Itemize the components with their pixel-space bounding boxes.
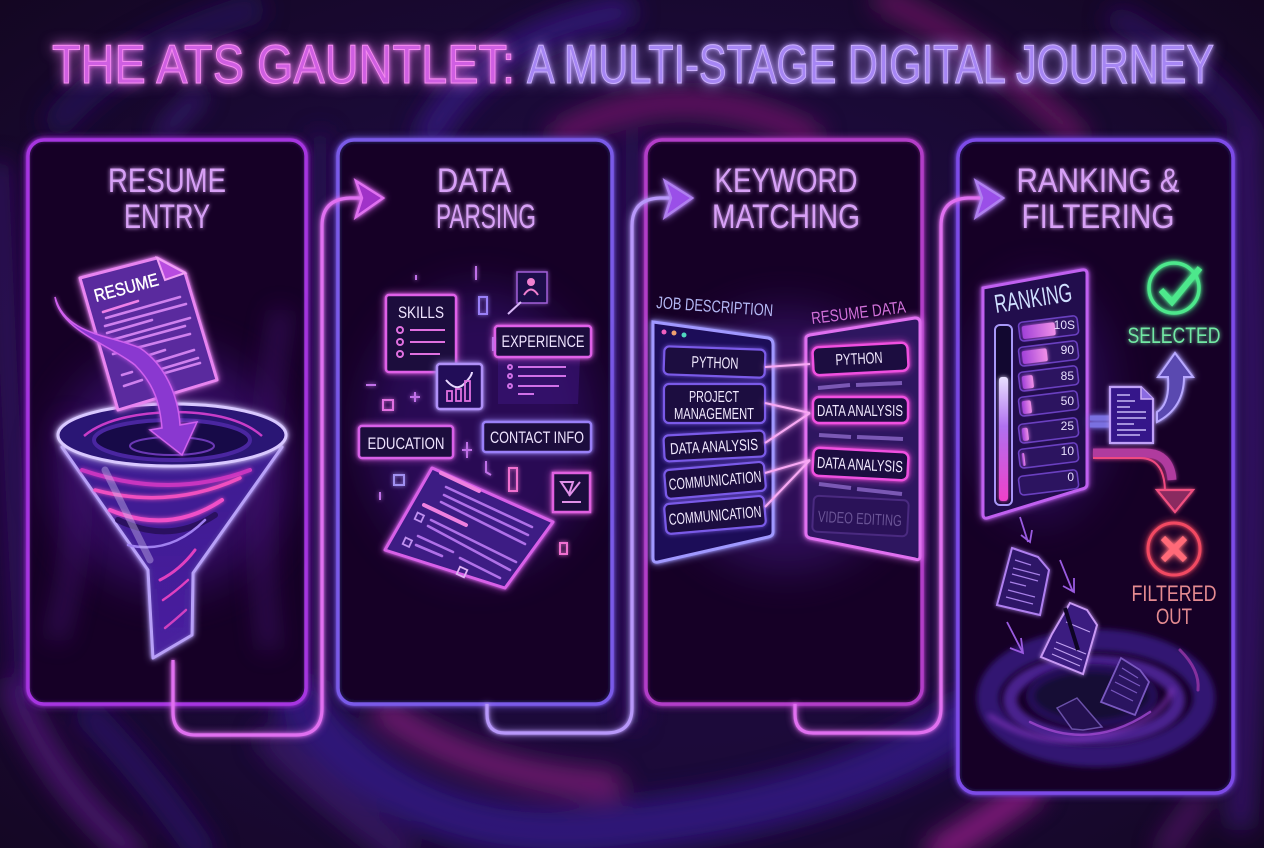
card: experience [495,326,591,404]
heading: resume entry: RESUME [108,162,226,200]
label: filtered out: OUT [1156,604,1192,629]
ranking rows: 0 [1067,470,1074,484]
heading: keyword matching: KEYWORD [714,162,858,200]
icon: funnel [58,404,286,658]
window: job description: COMMUNICATION [668,469,762,494]
card: contact info: CONTACT INFO [490,428,584,447]
ranking rows: 90 [1061,343,1074,357]
heading: data parsing: DATA [437,162,511,200]
matching lines [765,364,810,507]
title [52,33,1214,95]
window: job description: COMMUNICATION [668,504,762,529]
data particles [366,266,567,554]
heading: data parsing: PARSING [436,198,536,236]
card: skills [386,295,456,372]
vortex [988,640,1204,756]
ranking board: RANKING [992,277,1074,319]
icon: resume document [80,258,217,410]
card: education: EDUCATION [368,434,444,453]
heading: data parsing [436,162,536,236]
heading: ranking and filtering: FILTERING [1022,198,1174,236]
heading: resume entry [108,162,226,236]
window: resume data: DATA ANALYSIS [817,403,903,420]
arrow: into funnel [55,297,197,455]
arrow: selected up [1090,353,1193,425]
icon: filtered x [1148,523,1200,575]
heading: keyword matching [712,162,860,236]
window: resume data: PYTHON [835,350,883,369]
ranking rows: 25 [1061,419,1074,433]
window: job description: PYTHON [691,354,739,373]
panel: data parsing [338,140,612,704]
icon: selected check [1149,263,1200,313]
heading: keyword matching: MATCHING [712,198,860,236]
label: filtered out: FILTERED [1132,581,1216,606]
window: job description [653,322,773,562]
connector: data parsing to keyword matching [487,181,692,733]
window: job description: DATA ANALYSIS [670,437,758,458]
connector: resume entry to data parsing [173,181,383,735]
panel: ranking and filtering [958,140,1233,793]
window: job description: MANAGEMENT [674,406,754,423]
connector: keyword matching to ranking [795,181,1003,733]
window: resume data: DATA ANALYSIS [817,455,903,476]
label: resume data: RESUME DATA [810,297,907,328]
heading: resume entry: ENTRY [124,198,210,236]
card: skills: SKILLS [398,303,444,322]
heading: ranking and filtering: RANKING & [1016,162,1180,200]
icon: chart box [437,364,482,409]
icon: resume document: RESUME [92,269,161,306]
ranking rows: 50 [1061,394,1074,408]
label: job description: JOB DESCRIPTION [656,293,774,320]
panel: resume entry [28,140,306,704]
discarded documents [997,548,1149,730]
icon: mail check box [553,473,590,512]
window: job description: PROJECT [689,389,739,406]
ranking rows: 10S [1054,318,1075,332]
card: experience: EXPERIENCE [502,332,584,351]
card: contact info [483,422,591,452]
label: filtered out [1132,581,1216,629]
ranking board [983,270,1087,518]
arrow: filtered down [1093,453,1193,512]
panel: keyword matching [646,140,922,704]
heading: ranking and filtering [1016,162,1180,236]
title: THE ATS GAUNTLET: [52,33,515,95]
icon: ranked document [1110,387,1153,443]
card: education [359,426,453,458]
ranking rows: 10 [1061,444,1074,458]
ranking rows: 85 [1061,369,1074,383]
ranking thermometer [995,325,1012,505]
window: resume data: VIDEO EDITING [817,509,902,530]
icon: profile search [508,272,547,314]
ranking rows [1018,315,1079,495]
falling arrows [1007,517,1074,653]
label: selected: SELECTED [1128,323,1220,348]
window: resume data [806,318,920,560]
parsed document [385,468,553,588]
